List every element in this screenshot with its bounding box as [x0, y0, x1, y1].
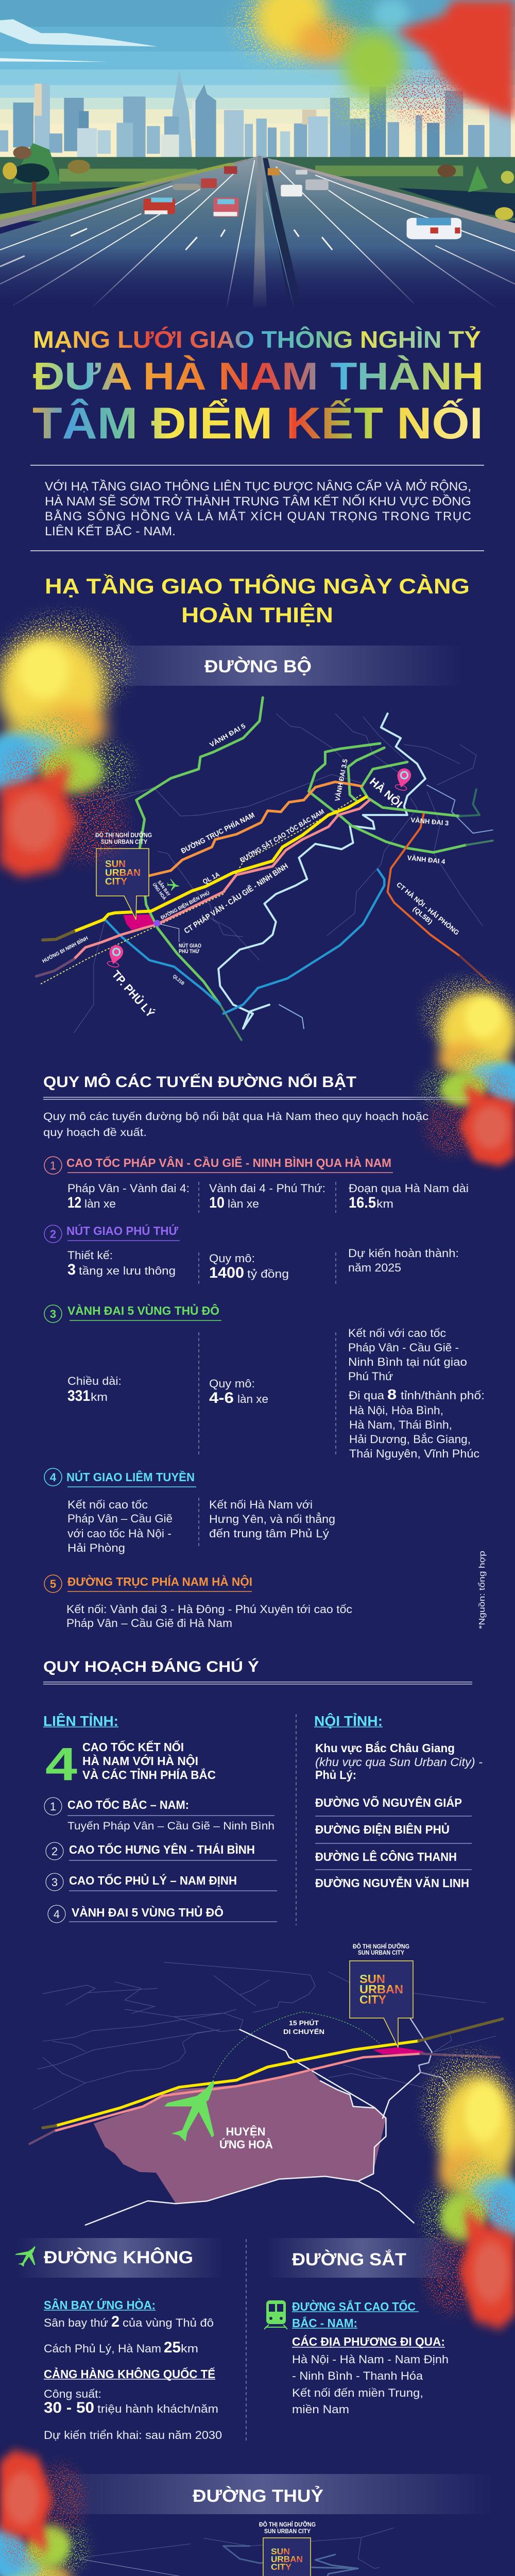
route 4: nút giao liêm tuyền: đến trung tâm Phủ Lý	[209, 1527, 329, 1540]
panel: đường sắt: - Ninh Bình - Thanh Hóa	[292, 2369, 423, 2382]
column divider	[246, 2239, 247, 2443]
column: liên tỉnh: 2	[52, 1845, 58, 1858]
band heading: đường sắt	[266, 2238, 460, 2278]
route 3: vành đai 5: Chiều dài:	[67, 1375, 122, 1387]
column: nội tỉnh: ĐƯỜNG VÕ NGUYÊN GIÁP	[315, 1795, 462, 1809]
map labels: (QL5B)	[411, 905, 434, 926]
panel: đường sắt	[292, 2299, 449, 2416]
route 1: cao tốc pháp vân: 16.5	[349, 1194, 376, 1211]
route 3: vành đai 5: làn xe	[237, 1393, 268, 1405]
intro text block: VỚI HẠ TẦNG GIAO THÔNG LIÊN TỤC ĐƯỢC NÂNG CẤP VÀ MỞ RỘNG,	[45, 479, 471, 494]
panel: đường không: km	[181, 2342, 198, 2355]
route 5: đường trục phía nam: Kết nối: Vành đai 3 - Hà Đông - Phú Xuyên tới cao tốc	[66, 1603, 352, 1616]
interchange marker	[153, 920, 161, 926]
map linework and district	[29, 1962, 503, 2225]
map labels: ỨNG HOÀ	[219, 2138, 273, 2151]
route 1: cao tốc pháp vân: 1	[50, 1159, 56, 1172]
icon: location pin hà nội	[393, 767, 413, 792]
column: liên tỉnh: HÀ NAM VỚI HÀ NỘI	[82, 1754, 198, 1768]
route 1: cao tốc pháp vân: Pháp Vân - Vành đai 4:	[67, 1182, 190, 1195]
panel: đường không: 2	[111, 2313, 119, 2330]
map labels: ĐƯỜNG TRỤC PHÍA NAM	[179, 810, 256, 855]
route 3: vành đai 5: Pháp Vân - Cầu Giẽ -	[348, 1341, 459, 1354]
title: ĐƯA HÀ NAM THÀNH	[33, 354, 484, 398]
band heading: đường không: ĐƯỜNG KHÔNG	[44, 2247, 193, 2267]
panel: đường không: SÂN BAY ỨNG HÒA:	[44, 2298, 156, 2312]
callout: sun urban city: ĐÔ THỊ NGHỈ DƯỠNG	[353, 1942, 409, 1950]
panel: đường không	[44, 2298, 222, 2442]
map labels: QL21B	[172, 974, 185, 986]
callout: sun urban city: SUN URBAN CITY	[358, 1949, 404, 1956]
route 3: vành đai 5: Phú Thứ	[348, 1370, 393, 1383]
callout: sun urban city: SUN URBAN CITY	[101, 838, 147, 845]
route 4: nút giao liêm tuyền: với cao tốc Hà Nội -	[67, 1527, 171, 1540]
band heading: đường sắt: ĐƯỜNG SẮT	[292, 2250, 406, 2269]
source note: *Nguồn: tổng hợp	[477, 1551, 487, 1629]
route 5: đường trục phía nam: ĐƯỜNG TRỤC PHÍA NAM HÀ NỘI	[67, 1574, 252, 1588]
powder splash: right of road map	[420, 977, 515, 1166]
powder splash: right of ứng hoà map	[420, 2053, 515, 2329]
panel: đường sắt: Hà Nội - Hà Nam - Nam Định	[292, 2353, 449, 2366]
route 2: nút giao phú thứ	[44, 1224, 459, 1284]
route 4: nút giao liêm tuyền: 4	[50, 1471, 57, 1484]
route 1: cao tốc pháp vân: 12	[67, 1194, 81, 1211]
route 4: nút giao liêm tuyền: Kết nối cao tốc	[67, 1498, 148, 1511]
route 3: vành đai 5: 4-6	[209, 1389, 234, 1406]
route 2: nút giao phú thứ: năm 2025	[348, 1261, 401, 1274]
map labels	[41, 722, 461, 1020]
hero sky	[0, 0, 515, 162]
route 5: đường trục phía nam: Pháp Vân – Cầu Giẽ đi Hà Nam	[66, 1617, 232, 1630]
route 2: nút giao phú thứ: tỷ đồng	[247, 1267, 289, 1280]
title: MẠNG LƯỚI GIAO THÔNG NGHÌN TỶ	[33, 326, 481, 353]
map labels: VÀNH ĐAI 3	[410, 816, 449, 827]
map: sân bay ứng hoà	[29, 1942, 503, 2225]
route 3: vành đai 5: Ninh Bình tại nút giao	[348, 1355, 467, 1368]
route 3: vành đai 5: Hải Dương, Bắc Giang,	[349, 1433, 471, 1446]
callout: sun urban city: ĐÔ THỊ NGHỈ DƯỠNG	[95, 831, 152, 839]
route 4: nút giao liêm tuyền	[44, 1468, 335, 1554]
route 3: vành đai 5: Hà Nam, Thái Bình,	[349, 1418, 452, 1431]
route 2: nút giao phú thứ: 2	[50, 1228, 56, 1241]
panel: đường không: 25	[164, 2339, 181, 2356]
route 3: vành đai 5	[44, 1303, 485, 1460]
panel: đường không: 30 - 50	[44, 2399, 94, 2416]
map labels: DI CHUYỂN	[283, 2028, 324, 2036]
panel: đường không: Sân bay thứ	[44, 2316, 108, 2329]
callout: sun urban city: SUN	[105, 859, 126, 869]
intro text block	[30, 465, 484, 551]
powder splash: left of water map	[0, 2450, 89, 2576]
heading: hạ tầng giao thông	[45, 573, 470, 627]
route 1: cao tốc pháp vân: Đoạn qua Hà Nam dài	[349, 1182, 469, 1195]
route 1: cao tốc pháp vân: làn xe	[228, 1197, 259, 1210]
route 2: nút giao phú thứ: 1400	[209, 1264, 244, 1281]
route 2: nút giao phú thứ: NÚT GIAO PHÚ THỨ	[66, 1224, 179, 1238]
map linework	[36, 698, 493, 1040]
map labels: ỨNG HOÀ	[151, 882, 168, 901]
route 3: vành đai 5: VÀNH ĐAI 5 VÙNG THỦ ĐÔ	[67, 1303, 219, 1317]
callout: sun urban city: URBAN	[359, 1982, 403, 1996]
column: liên tỉnh: Tuyến Pháp Vân – Cầu Giẽ – Ninh Bình	[67, 1820, 274, 1832]
map labels: NÚT GIAO	[179, 942, 201, 949]
route 1: cao tốc pháp vân: làn xe	[84, 1197, 116, 1210]
column: liên tỉnh: 4	[54, 1908, 60, 1921]
callout: sun urban city: CITY	[105, 876, 127, 887]
panel: đường không: Cách Phủ Lý, Hà Nam	[44, 2342, 161, 2355]
map labels: PHÚ THỨ	[179, 948, 200, 955]
route 2: nút giao phú thứ: 3	[67, 1261, 76, 1278]
icon: airport plane	[165, 876, 180, 891]
route 4: nút giao liêm tuyền: Hải Phòng	[67, 1541, 125, 1554]
map labels: HƯỚNG ĐI NINH BÌNH	[41, 935, 89, 964]
map labels	[219, 2019, 324, 2151]
map labels: VÀNH ĐAI 3.5	[333, 758, 349, 802]
column divider	[296, 1714, 297, 1925]
route 3: vành đai 5: 8	[387, 1386, 397, 1402]
route 4: nút giao liêm tuyền: Kết nối Hà Nam với	[209, 1498, 313, 1511]
map labels: VÀNH ĐAI 4	[407, 854, 446, 866]
map labels: HUYỆN	[226, 2125, 266, 2138]
column: liên tỉnh: 1	[50, 1800, 56, 1813]
route 2: nút giao phú thứ: tầng xe lưu thông	[79, 1264, 176, 1277]
icon: train	[264, 2300, 287, 2329]
column: liên tỉnh: CAO TỐC KẾT NỐI	[82, 1740, 184, 1754]
band heading: đường bộ: ĐƯỜNG BỘ	[204, 656, 312, 676]
band heading: đường bộ	[67, 646, 464, 686]
route 3: vành đai 5: 331	[67, 1387, 90, 1404]
column: liên tỉnh	[43, 1713, 277, 1923]
route 3: vành đai 5: Thái Nguyên, Vĩnh Phúc	[349, 1447, 479, 1460]
route 2: nút giao phú thứ: Dự kiến hoàn thành:	[348, 1247, 459, 1260]
panel: đường sắt: ĐƯỜNG SẮT CAO TỐC	[292, 2299, 416, 2313]
title: TÂM ĐIỂM KẾT NỐI	[32, 399, 483, 448]
section: quy mô các tuyến đường: quy hoạch đề xuất.	[43, 1127, 147, 1139]
panel: đường sắt: miền Nam	[292, 2403, 349, 2416]
map labels: CT PHÁP VÂN - CẦU GIẼ - NINH BÌNH	[182, 861, 290, 936]
powder splash: left of road map	[0, 614, 131, 877]
route 4: nút giao liêm tuyền: Pháp Vân – Cầu Giẽ	[67, 1512, 173, 1525]
panel: đường sắt: BẮC - NAM:	[292, 2316, 357, 2330]
column: nội tỉnh: ĐƯỜNG NGUYỄN VĂN LINH	[315, 1875, 469, 1890]
panel: đường sắt: Kết nối đến miền Trung,	[292, 2386, 423, 2399]
column: liên tỉnh: CAO TỐC PHỦ LÝ – NAM ĐỊNH	[69, 1873, 237, 1887]
column: liên tỉnh: VÀ CÁC TỈNH PHÍA BẮC	[82, 1767, 216, 1782]
map linework and rivers	[56, 2528, 467, 2576]
route 1: cao tốc pháp vân	[44, 1156, 469, 1213]
callout: sun urban city: URBAN	[105, 868, 141, 878]
intro text block: HÀ NAM SẼ SỚM TRỞ THÀNH TRUNG TÂM KẾT NỐI KHU VỰC ĐỒNG	[45, 494, 471, 509]
route 2: nút giao phú thứ: Quy mô:	[209, 1252, 255, 1265]
band heading: đường không	[16, 2238, 224, 2278]
route 4: nút giao liêm tuyền: NÚT GIAO LIÊM TUYỀN	[66, 1470, 195, 1484]
title	[32, 326, 484, 448]
column: liên tỉnh: 4	[45, 1739, 77, 1790]
panel: đường không: CẢNG HÀNG KHÔNG QUỐC TẾ	[44, 2366, 215, 2381]
column: nội tỉnh: Khu vực Bắc Châu Giang	[315, 1741, 455, 1755]
callout: sun urban city: CITY	[359, 1993, 386, 2006]
section: quy mô các tuyến đường	[43, 1073, 471, 1139]
route 3: vành đai 5: tỉnh/thành phố:	[401, 1389, 485, 1402]
callout: sun urban city	[259, 2520, 316, 2576]
callout: sun urban city: URBAN	[271, 2554, 303, 2564]
route 3: vành đai 5: Kết nối với cao tốc	[348, 1327, 446, 1340]
route 1: cao tốc pháp vân: 10	[209, 1194, 225, 1211]
column: liên tỉnh: 3	[52, 1876, 58, 1889]
column: liên tỉnh: VÀNH ĐAI 5 VÙNG THỦ ĐÔ	[72, 1905, 224, 1919]
map labels: ĐƯỜNG SẮT CAO TỐC BẮC NAM	[238, 807, 325, 864]
water map	[56, 2520, 467, 2576]
route 3: vành đai 5: 3	[50, 1308, 56, 1320]
map labels: SÂN BAY	[157, 879, 172, 897]
section: quy mô các tuyến đường: QUY MÔ CÁC TUYẾN ĐƯỜNG NỔI BẬT	[43, 1073, 356, 1091]
callout: sun urban city	[95, 831, 152, 920]
section: quy mô các tuyến đường: Quy mô các tuyến đường bộ nổi bật qua Hà Nam theo quy hoạch hoặc	[43, 1111, 428, 1123]
icon: big plane	[164, 2080, 214, 2142]
route 1: cao tốc pháp vân: km	[376, 1197, 393, 1210]
band heading: đường thuỷ	[31, 2474, 494, 2514]
map labels: ĐƯỜNG ĐIỆN BIÊN PHỦ	[160, 889, 211, 921]
icon: small plane	[15, 2246, 36, 2267]
intro text block: LIÊN KẾT BẮC - NAM.	[45, 524, 176, 538]
map labels: QL 1A	[201, 870, 221, 886]
panel: đường không: của vùng Thủ đô	[123, 2316, 214, 2329]
panel: đường không: Dự kiến triển khai: sau năm 2030	[44, 2429, 222, 2442]
callout: sun urban city	[350, 1942, 413, 2047]
callout: sun urban city: ĐÔ THỊ NGHỈ DƯỠNG	[259, 2520, 316, 2528]
column: nội tỉnh: Phủ Lý:	[315, 1768, 356, 1782]
route 5: đường trục phía nam: 5	[50, 1578, 56, 1590]
callout: sun urban city: SUN	[359, 1972, 385, 1986]
route 5: đường trục phía nam	[44, 1574, 352, 1630]
panel: đường sắt: CÁC ĐỊA PHƯƠNG ĐI QUA:	[292, 2334, 445, 2348]
route 3: vành đai 5: Đi qua	[349, 1389, 385, 1402]
column: liên tỉnh: CAO TỐC BẮC – NAM:	[67, 1798, 189, 1811]
map labels: CT HÀ NỘI - HẢI PHÒNG	[395, 880, 461, 937]
route 3: vành đai 5: Quy mô:	[209, 1377, 255, 1390]
callout: sun urban city: CITY	[271, 2562, 292, 2572]
map labels: TP. PHỦ LÝ	[109, 968, 157, 1020]
map labels: VÀNH ĐAI 5	[208, 722, 247, 749]
column: nội tỉnh: NỘI TỈNH:	[314, 1713, 383, 1729]
route 1: cao tốc pháp vân: Vành đai 4 - Phú Thứ:	[209, 1182, 325, 1195]
icon: location pin phủ lý	[106, 943, 125, 969]
column: liên tỉnh: LIÊN TỈNH:	[43, 1713, 118, 1729]
map labels: HÀ NỘI	[367, 775, 405, 810]
powder splash: hero top right	[232, 0, 515, 126]
panel: đường không: triệu hành khách/năm	[97, 2402, 218, 2415]
column: liên tỉnh: CAO TỐC HƯNG YÊN - THÁI BÌNH	[69, 1842, 255, 1856]
section: quy hoạch đáng chú ý: QUY HOẠCH ĐÁNG CHÚ Ý	[43, 1658, 259, 1675]
road map	[36, 698, 493, 1040]
heading: hạ tầng giao thông: HẠ TẦNG GIAO THÔNG NGÀY CÀNG	[45, 573, 470, 598]
route 3: vành đai 5: Hà Nội, Hòa Bình,	[349, 1404, 443, 1417]
column: nội tỉnh: (khu vực qua Sun Urban City) -	[315, 1755, 483, 1769]
hero illustration: highway and skyline	[0, 19, 515, 335]
column: nội tỉnh: ĐƯỜNG ĐIỆN BIÊN PHỦ	[315, 1822, 450, 1836]
route 3: vành đai 5: km	[91, 1391, 108, 1403]
callout: sun urban city: SUN	[271, 2547, 290, 2556]
route 1: cao tốc pháp vân: CAO TỐC PHÁP VÂN - CẦU GIẼ - NINH BÌNH QUA HÀ NAM	[66, 1156, 391, 1170]
panel: đường không: Công suất:	[44, 2387, 101, 2400]
intro text block: BẰNG SÔNG HỒNG VÀ LÀ MẮT XÍCH QUAN TRỌNG TRONG TRỤC	[45, 509, 471, 523]
route 4: nút giao liêm tuyền: Hưng Yên, và nối thẳng	[209, 1513, 335, 1526]
callout: sun urban city: SUN URBAN CITY	[264, 2528, 311, 2535]
map labels: 15 PHÚT	[289, 2019, 319, 2027]
heading: hạ tầng giao thông: HOÀN THIỆN	[181, 602, 333, 627]
column: nội tỉnh: ĐƯỜNG LÊ CÔNG THANH	[315, 1850, 457, 1863]
route 2: nút giao phú thứ: Thiết kế:	[67, 1249, 113, 1262]
band heading: đường thuỷ: ĐƯỜNG THUỶ	[193, 2486, 323, 2506]
column: nội tỉnh	[314, 1713, 483, 1890]
